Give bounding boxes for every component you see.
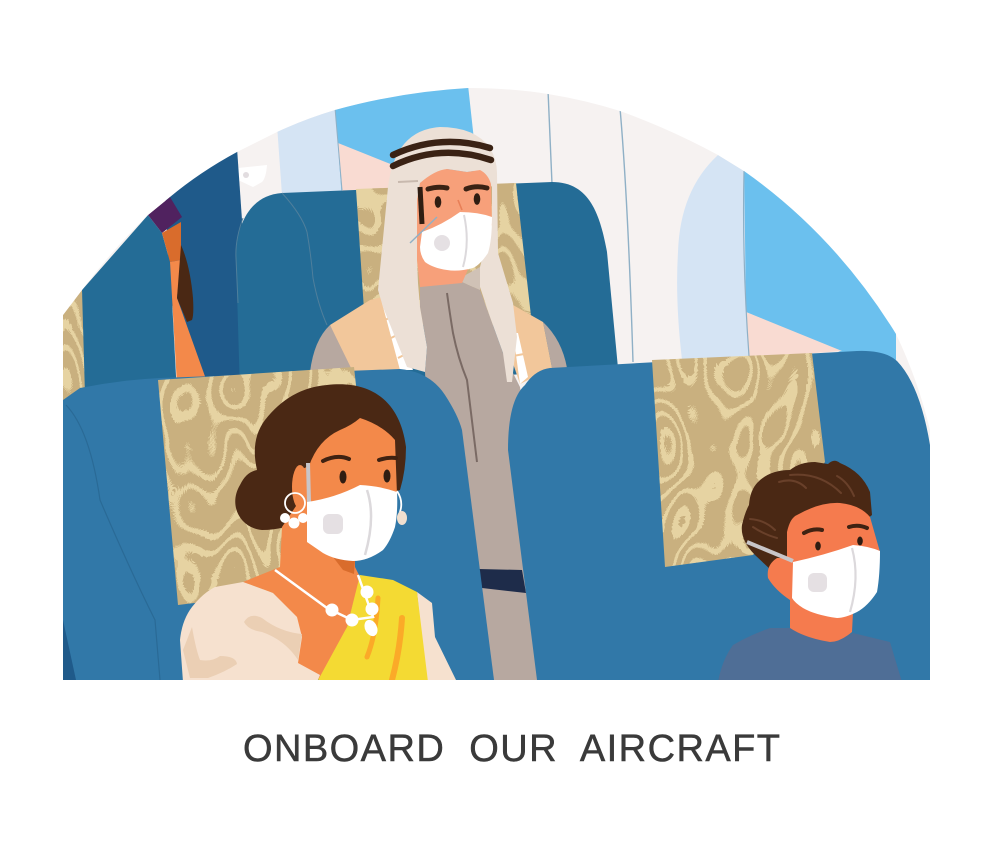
front left seat: [63, 360, 494, 680]
headcloth: [378, 127, 517, 382]
cloth crease: [398, 181, 418, 182]
left earring: [280, 493, 308, 528]
mask details: [808, 548, 856, 612]
sash stripes: [367, 598, 402, 680]
left sleeve: [180, 582, 320, 682]
eyebrows: [323, 457, 396, 461]
neck shadow: [333, 557, 355, 574]
eyebrows: [428, 187, 487, 189]
agal bands: [393, 142, 491, 166]
neck and chest: [243, 500, 360, 682]
wall panel lines: [548, 90, 633, 362]
shirt: [718, 628, 902, 682]
front right seat: [508, 345, 930, 680]
back row seats and passenger: [60, 148, 248, 410]
sleeve shading: [183, 616, 302, 678]
right earring: [397, 491, 407, 525]
strap: [747, 542, 793, 561]
woman passenger: [180, 384, 457, 682]
cabin wall: [84, 88, 930, 444]
belt: [479, 569, 526, 593]
face mask: [420, 212, 492, 271]
ear: [292, 465, 308, 509]
eyebrows: [804, 526, 867, 533]
side hair: [420, 187, 422, 224]
face mask: [792, 545, 880, 618]
vest trim: [382, 303, 528, 384]
robe: [420, 282, 537, 680]
vest: [330, 297, 405, 372]
hair: [742, 461, 872, 585]
nose: [458, 200, 462, 210]
sleeves: [310, 325, 351, 370]
cloth shadow: [462, 267, 480, 290]
face: [304, 418, 397, 506]
left window: [277, 85, 474, 200]
eyes: [815, 536, 863, 550]
mask details: [323, 490, 371, 555]
right window: [677, 155, 896, 360]
right sleeve: [417, 592, 457, 682]
man passenger: [310, 127, 567, 680]
mask details: [410, 215, 467, 267]
small mask on wall: [238, 165, 267, 187]
necklace: [275, 570, 380, 638]
title: ONBOARD OUR AIRCRAFT: [243, 728, 780, 770]
face: [417, 169, 492, 287]
robe seam: [447, 293, 477, 462]
face mask: [307, 485, 397, 561]
yellow sash: [317, 575, 428, 682]
middle seat: [236, 180, 618, 392]
face and neck: [768, 503, 880, 642]
infographic canvas: [63, 88, 930, 762]
hair highlights: [750, 475, 854, 538]
mask strap: [308, 463, 309, 502]
eyes: [340, 470, 390, 484]
boy passenger: [718, 461, 902, 682]
cabin illustration: [60, 85, 935, 685]
eyes: [435, 193, 480, 208]
hair and bun: [235, 384, 406, 530]
